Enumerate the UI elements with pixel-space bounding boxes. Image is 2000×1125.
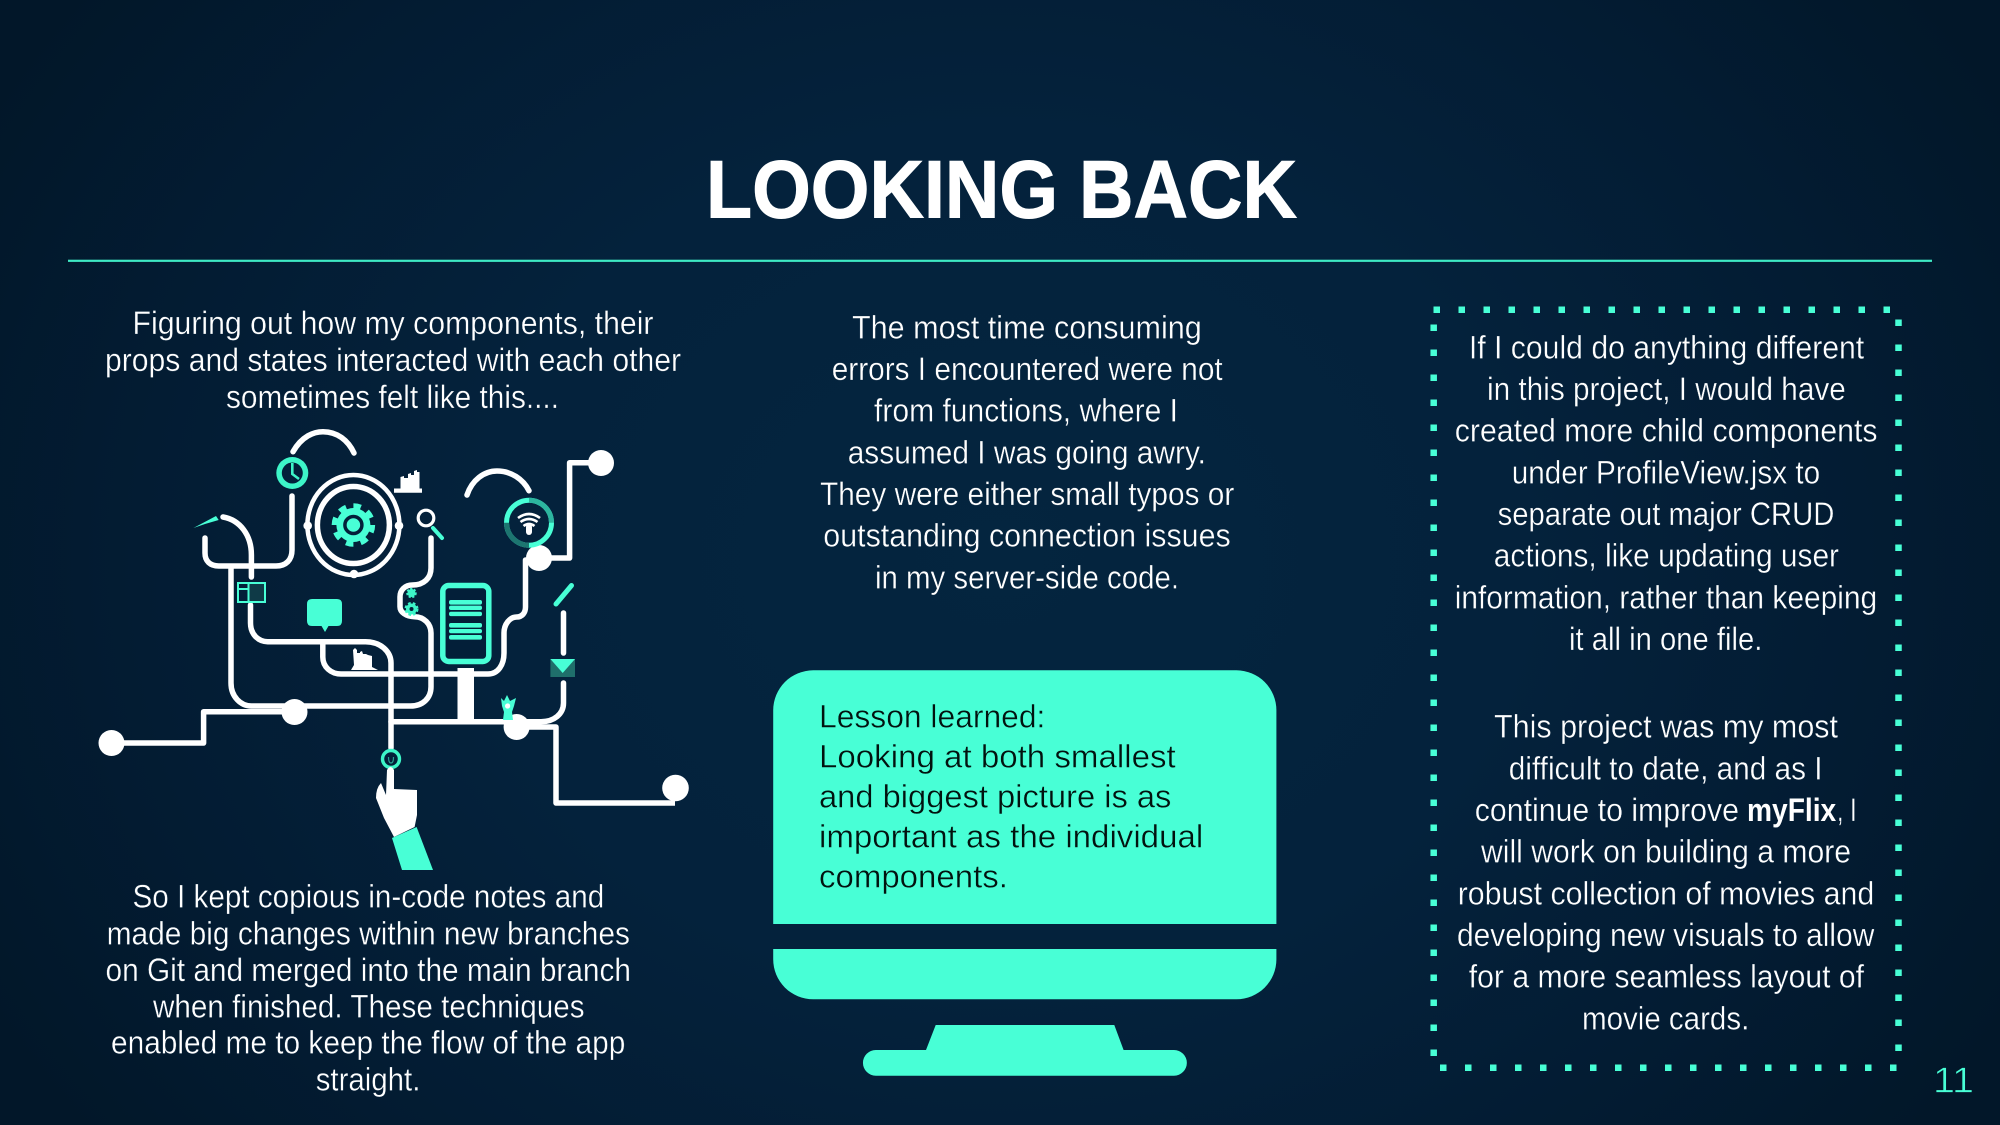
- icon: speech bubble: [307, 599, 342, 632]
- panel: dotted frame: [1434, 310, 1900, 1068]
- text block: future of myFlix: for a more seamless layout of: [1469, 959, 1864, 995]
- circuit illustration: [98, 432, 689, 870]
- text block: what I would do differently: [1455, 330, 1878, 657]
- text block: components intro: [105, 305, 681, 415]
- text block: components intro: props and states interacted with each other: [105, 342, 681, 378]
- text block: copious notes: on Git and merged into the main branch: [106, 952, 631, 988]
- icon: bar chart: [394, 470, 422, 493]
- text block: future of myFlix: continue to improve: [1475, 792, 1739, 828]
- title rule: [68, 260, 1932, 262]
- icon: wifi ring: [506, 500, 552, 545]
- text block: future of myFlix: This project was my most: [1494, 709, 1838, 745]
- text block: what I would do differently: created more child components: [1455, 413, 1878, 449]
- text block: what I would do differently: separate out major CRUD: [1498, 496, 1834, 532]
- text block: what I would do differently: under ProfileView.jsx to: [1512, 454, 1820, 490]
- text block: components intro: sometimes felt like this....: [226, 379, 559, 415]
- text block: future of myFlix: developing new visuals to allow: [1457, 917, 1875, 953]
- text block: copious notes: when finished. These techniques: [152, 989, 585, 1025]
- text block: components intro: Figuring out how my components, their: [132, 305, 654, 341]
- monitor bezel: [773, 949, 1276, 999]
- text block: time consuming errors: from functions, where I: [874, 393, 1178, 429]
- lesson learned text: Lesson learned:: [819, 698, 1045, 734]
- icon: gear with rings: [303, 475, 403, 578]
- icon: factory: [351, 648, 378, 670]
- icon: magnifier: [418, 510, 442, 538]
- text block: time consuming errors: assumed I was going awry.: [848, 434, 1206, 470]
- lesson learned text: and biggest picture is as: [819, 778, 1171, 814]
- icon: window: [238, 583, 265, 602]
- text block: copious notes: [106, 879, 631, 1097]
- text block: time consuming errors: [820, 309, 1235, 595]
- text block: time consuming errors: in my server-side code.: [875, 559, 1179, 595]
- text block: future of myFlix: myFlix: [1747, 792, 1836, 828]
- text block: future of myFlix: movie cards.: [1582, 1000, 1749, 1036]
- icon: envelope: [550, 659, 575, 677]
- icon: pen: [556, 586, 572, 604]
- text block: time consuming errors: The most time consuming: [852, 309, 1202, 345]
- connector pillars: [458, 668, 474, 720]
- icon: gears small: [406, 589, 417, 614]
- monitor screen: [773, 670, 1276, 924]
- text block: time consuming errors: They were either small typos or: [820, 476, 1235, 512]
- icon: pointing hand: [376, 767, 417, 837]
- lesson learned text: Looking at both smallest: [819, 738, 1176, 774]
- text block: copious notes: enabled me to keep the flow of the app: [111, 1025, 625, 1061]
- text block: time consuming errors: outstanding connection issues: [823, 518, 1231, 554]
- icon: phone: [443, 586, 489, 662]
- text block: future of myFlix: , I: [1837, 792, 1857, 828]
- text block: future of myFlix: difficult to date, and as I: [1509, 750, 1822, 786]
- icon: touch point: [382, 750, 400, 768]
- monitor stand: [863, 1025, 1187, 1076]
- text block: what I would do differently: it all in one file.: [1569, 621, 1762, 657]
- lesson learned text: components.: [819, 858, 1008, 894]
- circuit lines: [111, 432, 675, 803]
- text block: copious notes: made big changes within new branches: [107, 915, 630, 951]
- title: LOOKING BACK: [706, 144, 1297, 236]
- panel: monitor with lesson learned: [773, 670, 1276, 1076]
- text block: future of myFlix: [1457, 709, 1875, 1036]
- text block: future of myFlix: robust collection of movies and: [1458, 875, 1874, 911]
- lesson learned text: important as the individual: [819, 818, 1203, 854]
- lesson learned text: [819, 698, 1203, 894]
- text block: copious notes: So I kept copious in-code notes and: [132, 879, 604, 915]
- text block: what I would do differently: actions, like updating user: [1494, 538, 1839, 574]
- icon: cuff: [392, 827, 433, 870]
- text block: what I would do differently: in this project, I would have: [1487, 371, 1846, 407]
- icon: clock: [276, 457, 308, 489]
- page number: 11: [1933, 1059, 1974, 1100]
- text block: time consuming errors: errors I encountered were not: [832, 351, 1223, 387]
- text block: future of myFlix: will work on building a more: [1480, 834, 1851, 870]
- circuit end dots: [98, 450, 689, 801]
- text block: copious notes: straight.: [316, 1061, 420, 1097]
- icon: bulb: [501, 695, 516, 720]
- icon: leaf: [193, 516, 219, 528]
- text block: what I would do differently: information, rather than keeping: [1455, 579, 1877, 615]
- text block: what I would do differently: If I could do anything different: [1469, 330, 1864, 366]
